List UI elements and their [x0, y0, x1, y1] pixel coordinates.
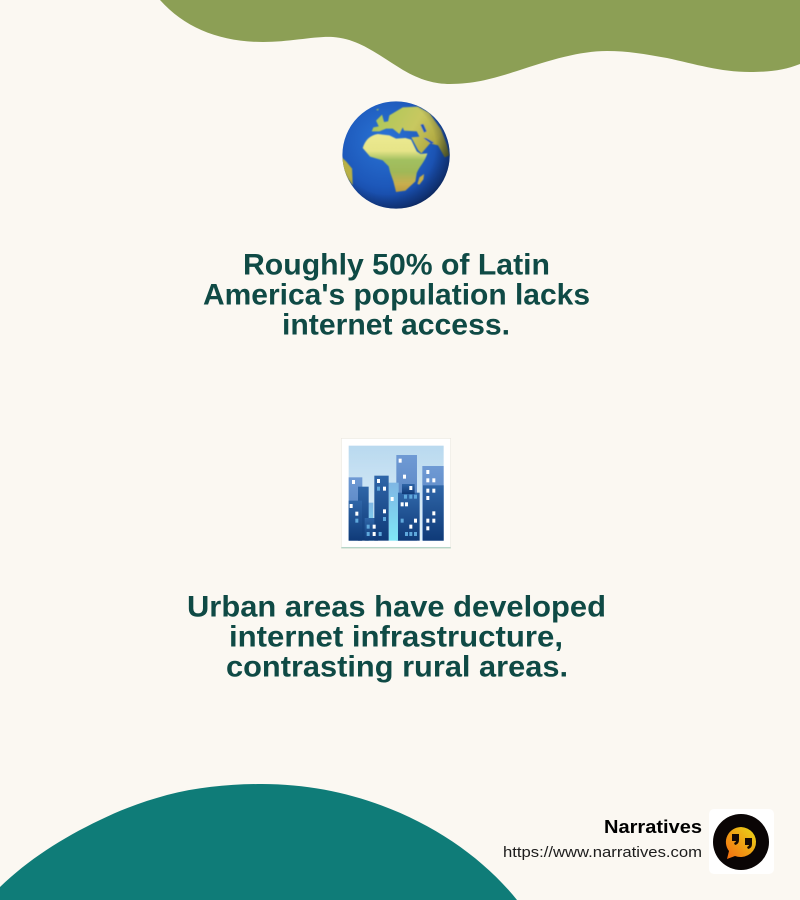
Europe and Asia	[372, 107, 449, 157]
Caspian Sea and Persian Gulf	[420, 124, 434, 144]
decorative green wave, top	[160, 0, 800, 84]
heading: urban versus rural: contrasting rural areas.	[226, 650, 568, 684]
heading: urban versus rural	[187, 590, 606, 684]
brand name: Narratives	[604, 817, 702, 837]
heading: internet access statistic	[203, 248, 590, 342]
South America	[341, 156, 353, 185]
Madagascar	[417, 174, 424, 185]
building windows	[350, 459, 435, 536]
icon: cityscape	[341, 438, 451, 548]
Africa	[363, 134, 427, 192]
heading: urban versus rural: internet infrastructure,	[229, 620, 563, 654]
icon: globe	[341, 101, 450, 209]
Scandinavia detail	[376, 109, 379, 111]
heading: internet access statistic: internet access.	[282, 308, 510, 342]
brand url: https://www.narratives.com	[503, 844, 702, 861]
heading: internet access statistic: Roughly 50% of Latin	[243, 248, 550, 282]
heading: urban versus rural: Urban areas have developed	[187, 590, 606, 624]
decorative teal hill, bottom	[0, 784, 517, 900]
heading: internet access statistic: America's population lacks	[203, 278, 590, 312]
icon: brand logo	[709, 809, 774, 874]
